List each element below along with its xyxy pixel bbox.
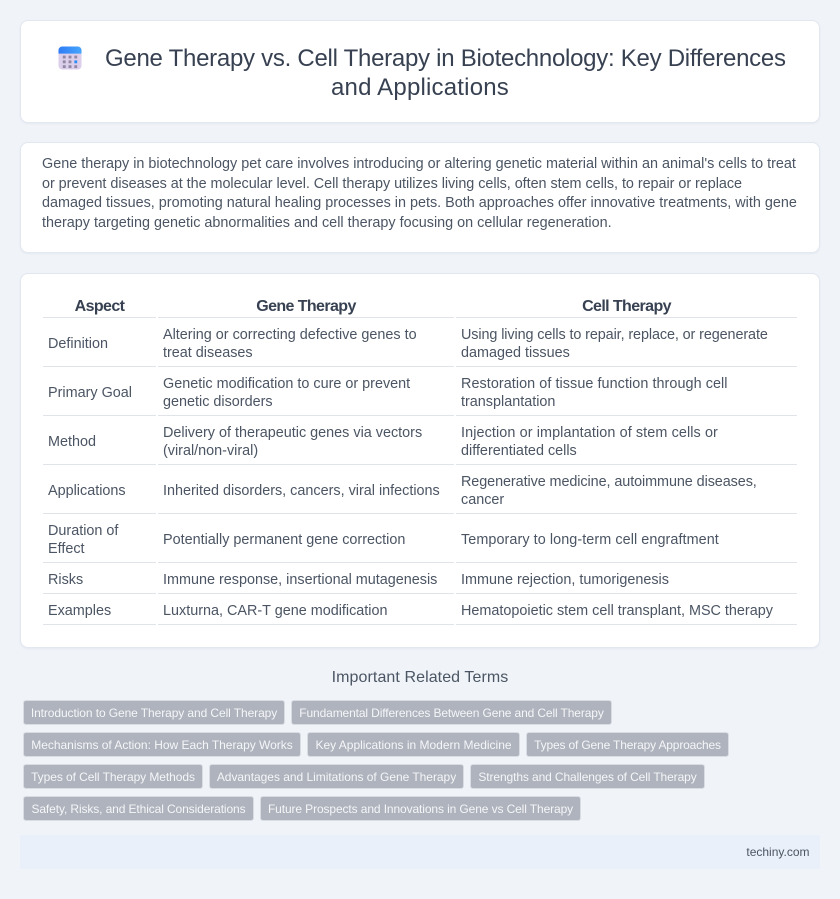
comparison table: Temporary to long-term cell engraftment: [461, 532, 719, 548]
tag: Future Prospects and Innovations in Gene vs Cell Therapy: [268, 802, 573, 816]
tag: [23, 700, 285, 725]
intro text panel: [20, 142, 820, 253]
comparison table: Immune response, insertional mutagenesis: [163, 572, 437, 588]
footer bar: [20, 835, 820, 869]
comparison table: Injection or implantation of stem cells or: [461, 425, 718, 441]
comparison table: Immune rejection, tumorigenesis: [461, 572, 669, 588]
title: and Applications: [331, 74, 509, 101]
tag: [470, 764, 705, 789]
comparison table: Potentially permanent gene correction: [163, 532, 405, 548]
comparison table: Altering or correcting defective genes to: [163, 327, 417, 343]
tag: Advantages and Limitations of Gene Therapy: [217, 770, 456, 784]
intro paragraph: [42, 156, 797, 231]
comparison table: cancer: [461, 492, 504, 508]
title: Gene Therapy vs. Cell Therapy in Biotechnology: Key Differences: [105, 45, 786, 72]
comparison table: Restoration of tissue function through cell: [461, 376, 728, 392]
comparison table: (viral/non-viral): [163, 443, 258, 459]
comparison table: Risks: [48, 572, 83, 588]
tag: Key Applications in Modern Medicine: [315, 738, 512, 752]
related terms heading: Important Related Terms: [332, 669, 508, 686]
comparison table: [43, 298, 797, 625]
comparison table: Aspect: [75, 298, 124, 315]
comparison table: Luxturna, CAR-T gene modification: [163, 603, 388, 619]
comparison table: Effect: [48, 541, 85, 557]
tag: [23, 732, 301, 757]
comparison table: Method: [48, 434, 96, 450]
intro paragraph: damaged tissues, promoting natural healing processes in pets. Both approaches offer innovative treatments, with gene: [42, 195, 797, 211]
comparison table: Inherited disorders, cancers, viral infections: [163, 483, 440, 499]
comparison table: Genetic modification to cure or prevent: [163, 376, 410, 392]
icon: calendar grid: [58, 46, 82, 70]
comparison table: Hematopoietic stem cell transplant, MSC therapy: [461, 603, 773, 619]
comparison table panel: [20, 273, 820, 648]
comparison table: damaged tissues: [461, 345, 570, 361]
comparison table: Duration of: [48, 523, 118, 539]
comparison table: Primary Goal: [48, 385, 132, 401]
comparison table: transplantation: [461, 394, 555, 410]
title: [105, 45, 786, 101]
comparison table: differentiated cells: [461, 443, 577, 459]
tag: [526, 732, 729, 757]
comparison table: Definition: [48, 336, 108, 352]
intro paragraph: therapy targeting genetic abnormalities and cell therapy focusing on cellular regeneration.: [42, 215, 612, 231]
comparison table: treat diseases: [163, 345, 253, 361]
related term tags: [23, 700, 729, 821]
comparison table: Using living cells to repair, replace, or regenerate: [461, 327, 768, 343]
tag: Safety, Risks, and Ethical Considerations: [31, 802, 246, 816]
tag: Types of Cell Therapy Methods: [31, 770, 195, 784]
tag: [23, 796, 254, 821]
header card: [20, 20, 820, 123]
tag: [23, 764, 203, 789]
tag: [260, 796, 581, 821]
tag: [291, 700, 612, 725]
tag: [307, 732, 520, 757]
tag: Fundamental Differences Between Gene and Cell Therapy: [299, 706, 604, 720]
tag: [209, 764, 464, 789]
footer site name: techiny.com: [746, 845, 810, 859]
comparison table: Gene Therapy: [256, 298, 356, 315]
tag: Types of Gene Therapy Approaches: [534, 738, 721, 752]
comparison table: Delivery of therapeutic genes via vectors: [163, 425, 422, 441]
comparison table: Applications: [48, 483, 126, 499]
comparison table: Examples: [48, 603, 111, 619]
comparison table: genetic disorders: [163, 394, 273, 410]
comparison table: Regenerative medicine, autoimmune diseases,: [461, 474, 757, 490]
intro paragraph: Gene therapy in biotechnology pet care involves introducing or altering genetic material within an animal's cells to treat: [42, 156, 796, 172]
intro paragraph: or prevent diseases at the molecular level. Cell therapy utilizes living cells, often stem cells, to repair or replace: [42, 176, 742, 192]
tag: Strengths and Challenges of Cell Therapy: [478, 770, 697, 784]
comparison table: Cell Therapy: [582, 298, 671, 315]
tag: Introduction to Gene Therapy and Cell Therapy: [31, 706, 277, 720]
tag: Mechanisms of Action: How Each Therapy Works: [31, 738, 293, 752]
